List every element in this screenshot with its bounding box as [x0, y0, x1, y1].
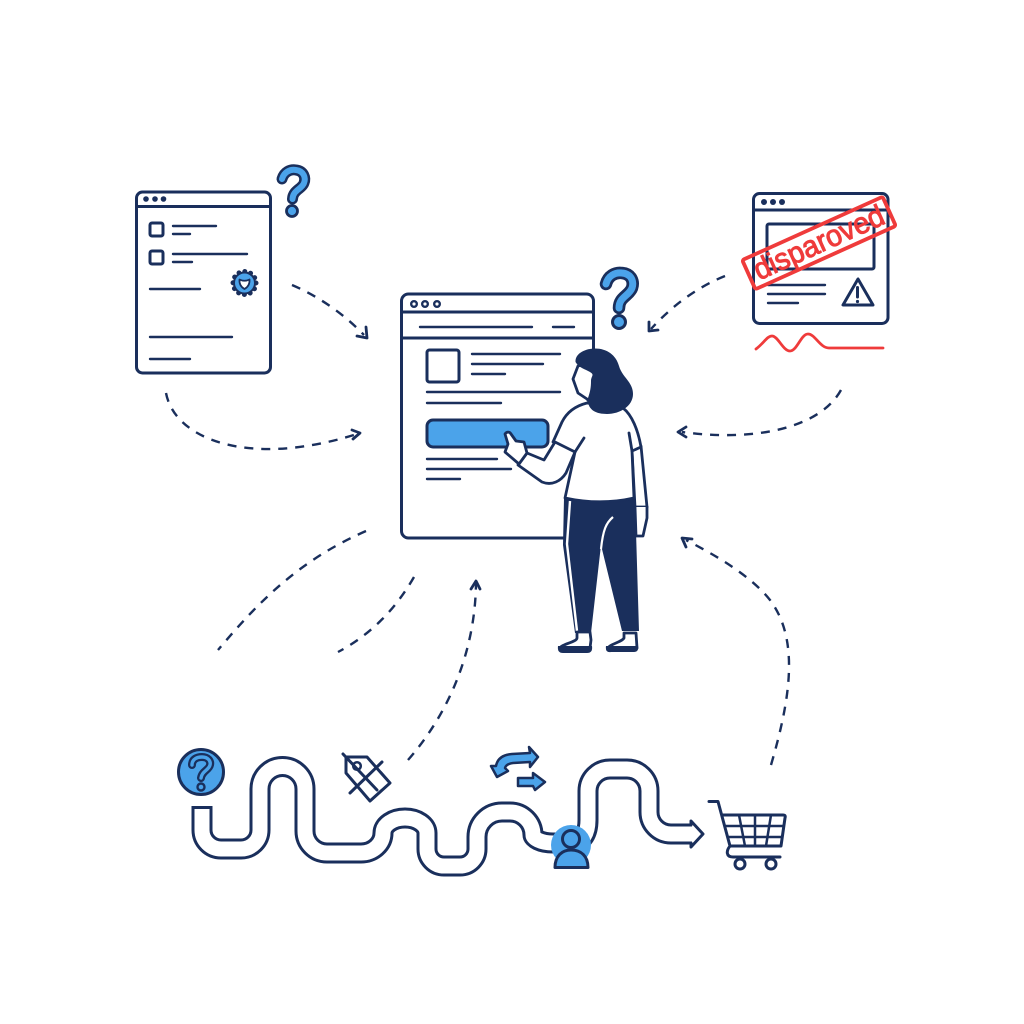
road arrowhead: [691, 821, 703, 847]
icon: warning triangle: [843, 279, 873, 305]
chart: red declining squiggle: [756, 334, 883, 351]
arrow: cart back to centre: [682, 538, 789, 765]
right arm and hand: [632, 446, 647, 536]
arrow: checklist to centre top: [292, 285, 367, 338]
panel: central browser window: [402, 294, 594, 538]
icon: shopping cart: [709, 802, 785, 869]
icon: central question mark: [606, 273, 633, 328]
arrow: disapproved lower to centre: [678, 390, 841, 437]
stamp: disparoved: disparoved: [748, 199, 890, 287]
sleeve details: [575, 433, 632, 452]
shirt: [553, 403, 641, 502]
arrow: disapproved to centre: [649, 276, 725, 331]
arrow: tag to centre: [408, 581, 480, 760]
dashed connector centre-left: [338, 577, 414, 652]
figure: woman pressing the button: [505, 348, 647, 653]
panel: checklist browser window: [136, 192, 270, 373]
icon: person on journey: [551, 825, 591, 868]
icon: question mark top left: [282, 170, 305, 216]
dashed connector left: [218, 531, 366, 650]
image placeholder: [427, 350, 459, 382]
pants: [563, 498, 639, 633]
hair: [575, 348, 633, 414]
hand pointing: [505, 432, 527, 464]
panel: disapproved browser window: [754, 194, 888, 324]
text lines: [427, 354, 560, 403]
face: [573, 360, 600, 405]
text lines below button: [427, 459, 511, 479]
checklist rows: [150, 223, 247, 359]
icon: verification badge with heart: [233, 272, 256, 294]
journey road: [202, 766, 703, 866]
icon: exchange arrows: [491, 747, 545, 790]
arrow: checklist to centre lower: [166, 393, 360, 449]
icon: question circle: [178, 750, 224, 794]
call-to-action button: [427, 420, 548, 447]
left arm: [518, 442, 575, 483]
icon: crossed-out price tag: [343, 754, 390, 801]
shoes: [558, 632, 638, 653]
